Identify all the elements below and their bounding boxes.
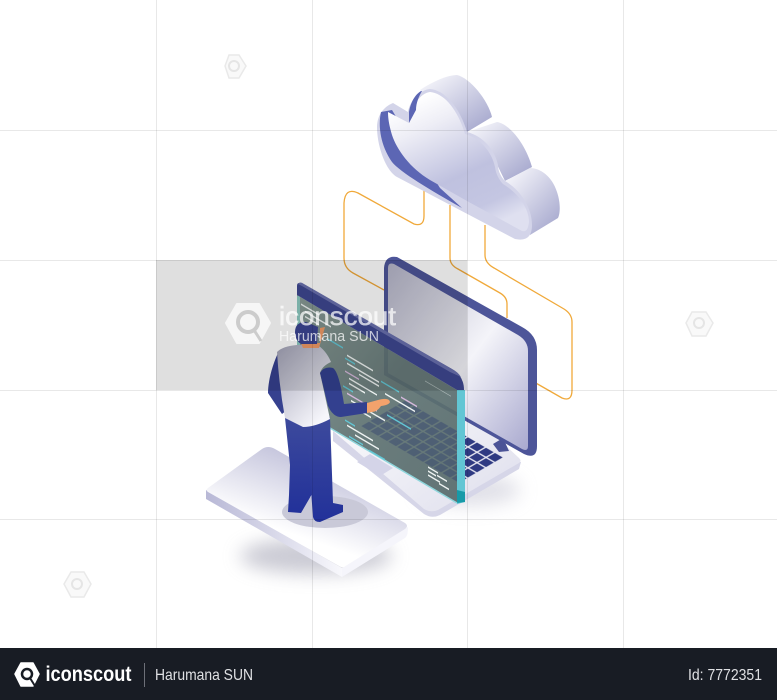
laptop — [333, 375, 521, 517]
hand — [367, 399, 390, 413]
monitor screen — [388, 264, 528, 450]
laptop base side — [333, 431, 521, 517]
code lines — [301, 303, 451, 499]
header bar — [297, 283, 464, 390]
centre watermark — [226, 301, 397, 345]
grey watermark block — [156, 260, 467, 390]
small watermark bottom — [64, 572, 91, 597]
platform top — [206, 447, 407, 567]
person — [268, 322, 390, 522]
header highlight — [298, 282, 461, 377]
teal edge — [457, 390, 465, 504]
neck — [301, 327, 325, 348]
right leg — [305, 417, 343, 522]
platform left side — [206, 490, 342, 577]
back arm — [268, 351, 290, 414]
footer bar — [0, 648, 777, 700]
laptop shadow — [420, 474, 520, 506]
cloud notch rim — [409, 91, 422, 123]
left leg — [285, 418, 312, 513]
monitor hinge — [493, 438, 509, 452]
front arm — [320, 368, 367, 417]
monitor frame — [384, 257, 537, 456]
platform — [206, 447, 408, 577]
cloud middle lobe — [467, 122, 532, 181]
cloud — [377, 75, 560, 240]
watermark hex icon — [226, 304, 270, 343]
teal edge dark — [457, 490, 465, 503]
footer id: Id: 7772351 — [688, 667, 762, 684]
cloud front rim — [377, 89, 532, 240]
footer logo text: iconscout — [46, 663, 132, 686]
cloud blue inner rim — [380, 110, 462, 208]
footer divider — [144, 663, 145, 687]
keyboard — [360, 400, 504, 484]
orange connector lines — [344, 188, 572, 399]
monitor — [384, 257, 537, 456]
footer logo icon — [15, 663, 39, 686]
platform shadow — [240, 538, 392, 574]
footer author: Harumana SUN — [155, 667, 253, 684]
head hair — [295, 322, 318, 344]
glass panel — [297, 295, 457, 503]
platform right side — [342, 527, 408, 577]
watermark author: Harumana SUN — [279, 329, 379, 345]
cloud inner face — [388, 92, 529, 231]
torso — [277, 344, 331, 427]
small watermark right — [686, 312, 713, 336]
touchpad — [357, 454, 393, 476]
watermark name: iconscout — [279, 301, 397, 331]
foot shadow — [282, 496, 368, 528]
left teal edge — [297, 296, 300, 346]
small watermark top — [225, 55, 246, 78]
code screen — [297, 282, 504, 504]
laptop base top — [333, 375, 520, 511]
keys seen through glass — [360, 400, 504, 484]
cloud right lobe — [505, 168, 560, 235]
cloud top lobe — [420, 75, 492, 132]
bottom edge highlight — [330, 428, 457, 503]
